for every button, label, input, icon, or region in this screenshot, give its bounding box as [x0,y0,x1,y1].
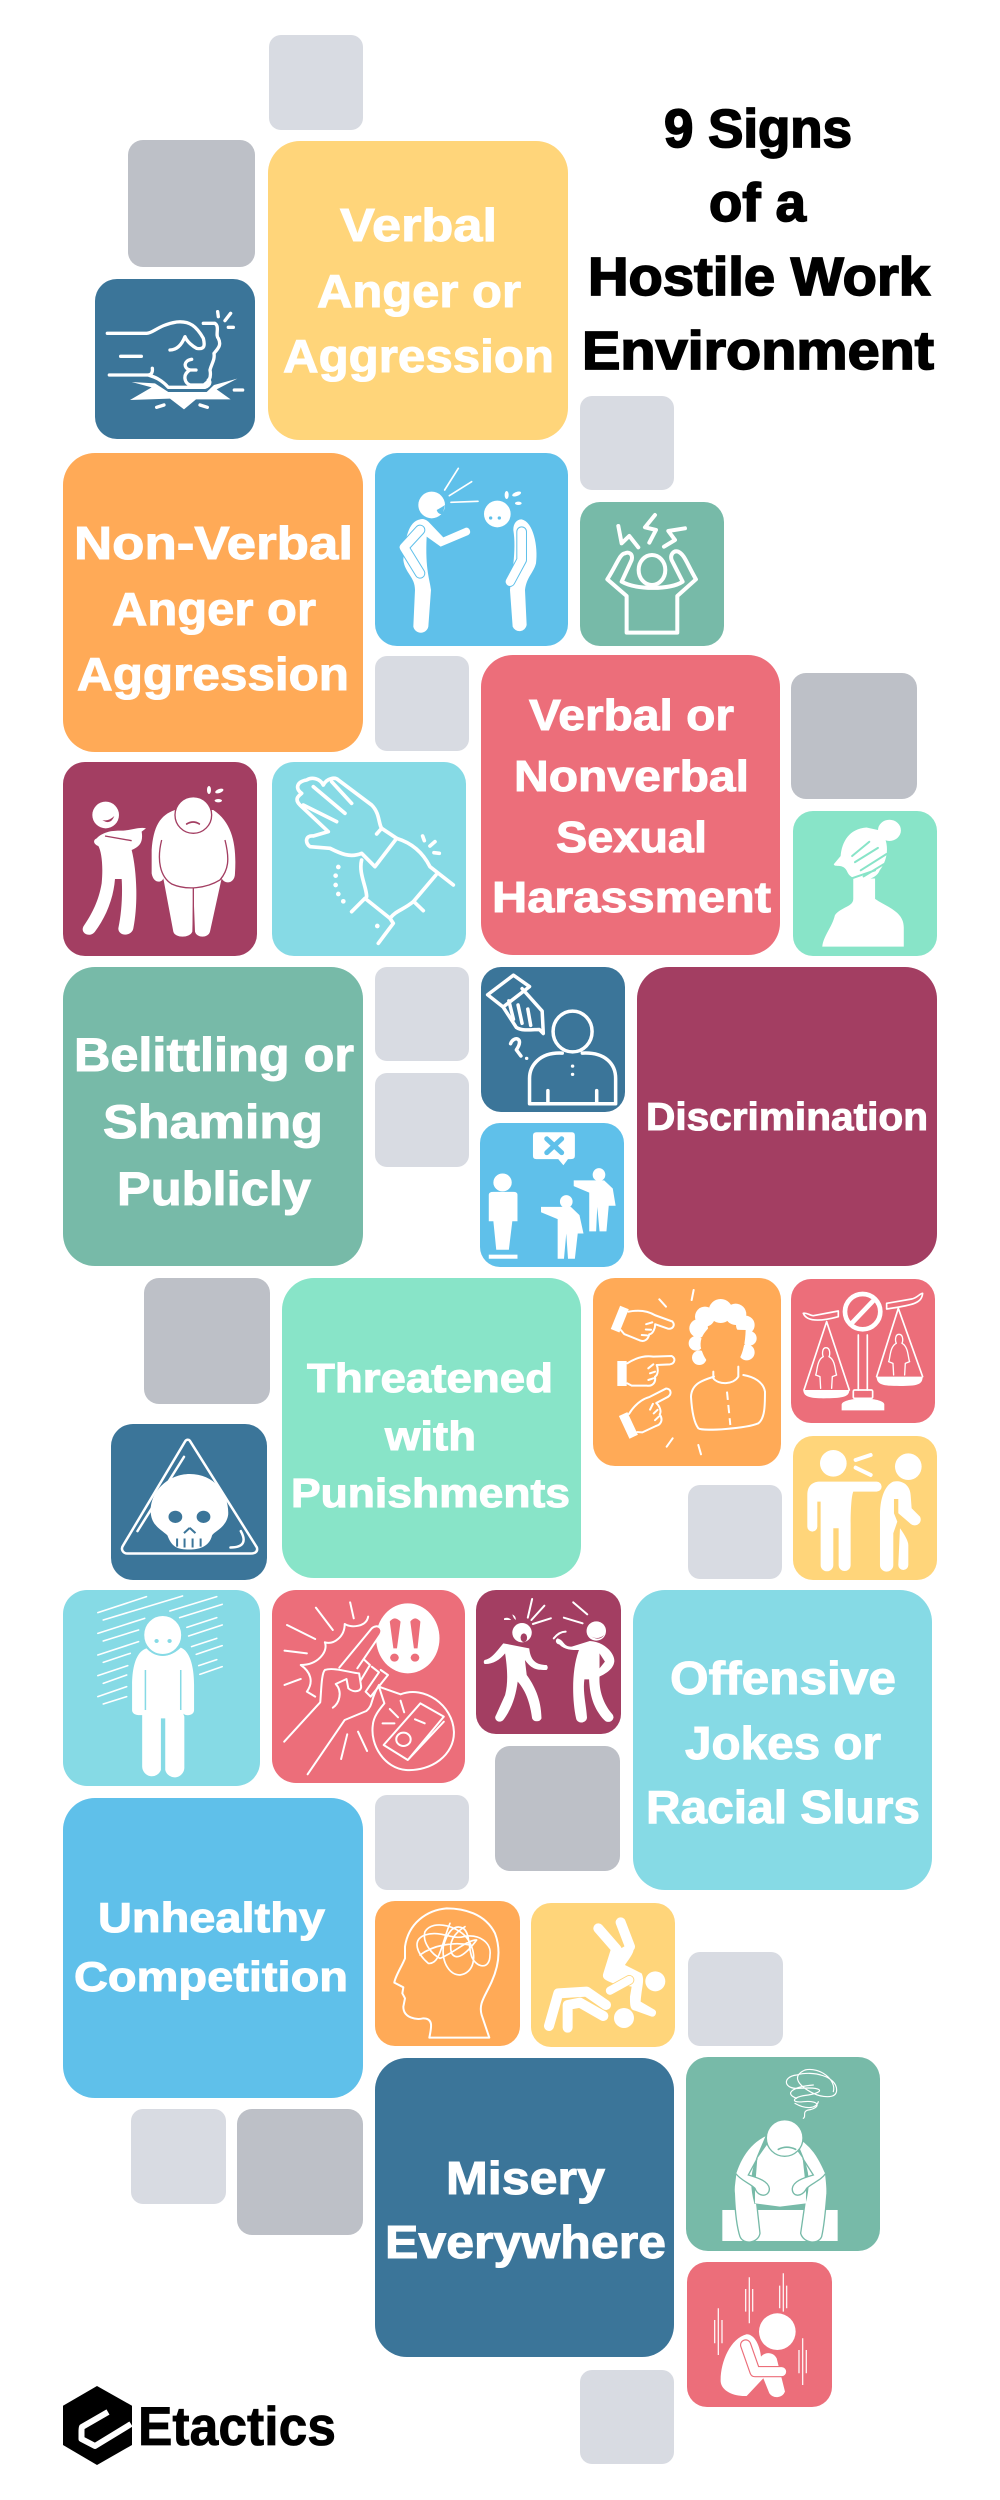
icon: person under pressure lines [63,1590,260,1786]
panel: Belittling or Shaming Publicly: Publicly [117,1162,311,1215]
icon: hand pointing at person [481,967,625,1112]
logo: Etactics [63,2386,336,2465]
panel: Unhealthy Competition [63,1798,363,2098]
panel: Discrimination [637,967,937,1266]
icon: person lunging at another [476,1590,621,1734]
panel: Verbal Anger or Aggression [268,141,568,440]
panel: Threatened with Punishments: with [384,1413,476,1459]
title: of a [709,173,807,233]
panel: Verbal Anger or Aggression: Aggression [283,330,554,382]
icon: group excluding a person [480,1123,624,1267]
icon: hands grabbing wrist [272,762,466,956]
panel: Verbal or Nonverbal Sexual Harassment [481,655,780,955]
panel: Non-Verbal Anger or Aggression [63,453,363,752]
panel: Misery Everywhere: Misery [446,2152,605,2204]
panel: Verbal Anger or Aggression: Anger or [317,265,521,317]
panel: Unhealthy Competition: Unhealthy [98,1894,326,1941]
icon: dejected person with scribble thought [686,2057,880,2251]
panel: Verbal or Nonverbal Sexual Harassment: Harassment [492,873,771,922]
icon: scales with prohibition sign [791,1279,935,1423]
panel: Threatened with Punishments: Threatened [307,1355,553,1401]
panel: Threatened with Punishments [282,1278,581,1578]
panel: Non-Verbal Anger or Aggression: Non-Verbal [74,517,353,569]
panel: Misery Everywhere: Everywhere [385,2216,666,2268]
panel: Verbal or Nonverbal Sexual Harassment: Sexual [556,813,707,862]
icon: finger with warning and phone [272,1590,465,1783]
panel: Offensive Jokes or Racial Slurs: Jokes or [685,1717,881,1769]
icon: person yelling at another person [793,1436,937,1580]
logo: Etactics: Etactics [138,2395,336,2457]
icon: figure being thrown down [531,1903,675,2047]
icon: person mocking another person [63,762,257,956]
panel: Belittling or Shaming Publicly: Belittling or [74,1028,354,1081]
panel: Offensive Jokes or Racial Slurs: Racial Slurs [646,1781,920,1833]
panel: Verbal Anger or Aggression: Verbal [340,199,497,251]
title [582,99,934,381]
panel: Offensive Jokes or Racial Slurs [633,1590,932,1890]
icon: person crouching in distress [687,2262,832,2407]
panel: Verbal or Nonverbal Sexual Harassment: Nonverbal [514,752,749,801]
panel: Offensive Jokes or Racial Slurs: Offensive [670,1652,896,1704]
panel: Threatened with Punishments: Punishments [291,1470,570,1516]
panel: Non-Verbal Anger or Aggression: Aggression [77,648,349,700]
panel: Discrimination: Discrimination [646,1096,928,1139]
title: Hostile Work [588,247,931,307]
icon: hands pointing at a woman [593,1278,781,1466]
panel: Misery Everywhere [375,2058,674,2357]
panel: Belittling or Shaming Publicly: Shaming [103,1095,323,1148]
icon: head with tangled brain [375,1901,520,2046]
title: Environment [582,321,934,381]
icon: two figures shouting [375,453,568,646]
icon: woman with hand on her face [793,811,937,956]
icon: stressed person with lightning [580,502,724,646]
panel: Verbal or Nonverbal Sexual Harassment: Verbal or [529,691,734,740]
panel: Non-Verbal Anger or Aggression: Anger or [112,583,316,635]
panel: Belittling or Shaming Publicly [63,967,363,1266]
title: 9 Signs [664,99,852,159]
icon: fist smashing [95,279,255,439]
panel: Unhealthy Competition: Competition [74,1953,348,2000]
icon: skull warning triangle [111,1424,267,1580]
